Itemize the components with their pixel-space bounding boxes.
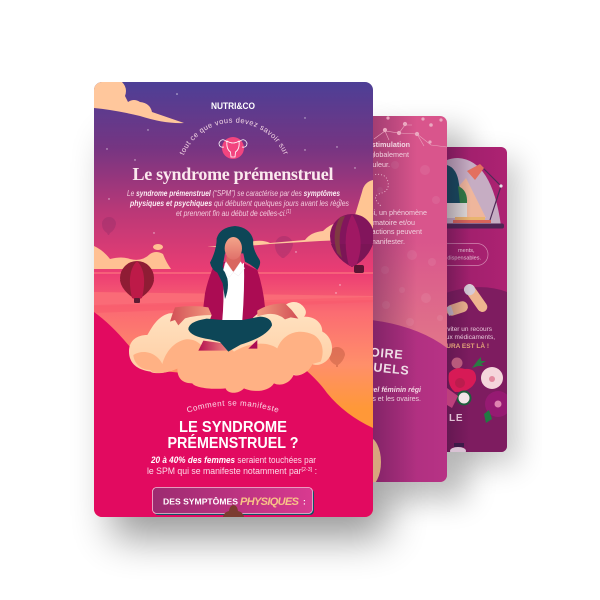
hair — [210, 226, 260, 299]
body text: 20 à 40% des femmes seraient touchées par — [150, 455, 316, 465]
text: medication: CURA EST LÀ ! — [442, 341, 489, 350]
text block: inflammation: réactions peuvent — [365, 227, 422, 236]
curved heading: comment se manifeste: Comment se manifeste — [187, 400, 278, 412]
body text: le SPM qui se manifeste notamment par — [147, 466, 307, 476]
panel: front card — [94, 82, 373, 517]
title group: brand: NUTRI&CO — [211, 101, 255, 111]
heading: le syndrome: LE SYNDROME — [179, 419, 287, 436]
cloud: right thin — [208, 224, 334, 247]
intro paragraph — [127, 189, 349, 218]
collar — [223, 262, 245, 277]
intro paragraph: Le syndrome prémenstruel (“SPM”) se caractérise par des symptômes — [127, 189, 340, 198]
button: physical symptoms: PHYSIQUES — [240, 496, 300, 508]
text block: inflammation: ainsi, un phénomène — [360, 208, 427, 217]
illustration stub — [373, 439, 381, 482]
stars — [106, 93, 356, 294]
rounded text pill: indispensables. — [443, 256, 481, 262]
text block: inflammation: inflammatoire et/ou — [354, 218, 415, 227]
infographic stack of three cards — [86, 82, 532, 564]
text block: cycle: cycle menstruel féminin régi — [326, 387, 422, 394]
text: medication: éviter un recours — [444, 326, 493, 333]
body text: [2-3] — [302, 467, 313, 473]
text: medication — [447, 326, 494, 348]
button: physical symptoms: DES SYMPTÔMES — [163, 496, 238, 506]
text block: inflammation — [373, 210, 427, 244]
heading: le syndrome: PRÉMENSTRUEL ? — [168, 435, 298, 452]
intro paragraph: et prennent fin au début de celles-ci. — [176, 209, 305, 218]
lower dark panel — [447, 287, 507, 452]
hot air balloon: left — [120, 261, 154, 303]
rounded text pill: ments, — [458, 248, 475, 254]
books and desk — [447, 217, 504, 228]
heading: partial: HISTOIRE — [339, 342, 404, 362]
heading: partial — [373, 348, 408, 375]
face — [225, 237, 242, 260]
text block: cycle — [373, 386, 422, 401]
text block: inflammation: se manifester. — [360, 237, 405, 246]
woman at desk — [447, 165, 486, 218]
lower panel curve — [373, 320, 447, 482]
shirt — [222, 263, 244, 320]
cloud under the woman — [129, 302, 332, 393]
drop shadows — [112, 130, 517, 538]
dotted curve — [372, 174, 388, 206]
body text — [147, 455, 317, 476]
molecule network — [374, 117, 447, 147]
bubble pattern — [377, 161, 443, 326]
shadow cast on middle card — [373, 116, 410, 482]
text block: overstimulation — [373, 142, 410, 167]
faint balloons — [102, 217, 345, 367]
intro paragraph: physiques et psychiques qui débutent quelques jours avant les règles — [129, 199, 349, 208]
text block: overstimulation: globalement — [370, 150, 409, 159]
neck — [226, 255, 241, 272]
left hand — [170, 306, 212, 325]
icon: uterus — [219, 137, 247, 159]
curved subtitle: tout ce que vous devez savoir sur — [180, 117, 288, 155]
heading: le syndrome — [168, 419, 298, 452]
intro paragraph: [1] — [285, 209, 292, 215]
hot air balloon: right — [330, 214, 374, 273]
bottom icon stub — [450, 443, 466, 452]
lamp alcove — [447, 158, 501, 224]
horizon stripes — [94, 272, 373, 313]
icon stub: bottom — [223, 505, 244, 517]
heading: partial: MENSTRUELS — [316, 354, 410, 378]
text: medication: aux médicaments, — [442, 334, 495, 341]
woman meditating — [170, 226, 298, 352]
shoes — [198, 341, 228, 351]
icon: bandages — [447, 284, 488, 316]
cloud: left — [94, 246, 171, 269]
trousers — [188, 317, 272, 352]
text block: overstimulation: surstimulation — [360, 140, 410, 149]
right hand — [257, 303, 298, 319]
shadow cast on back card — [447, 147, 468, 452]
pink hill — [94, 312, 373, 517]
body text: : — [312, 466, 317, 476]
cloud: top left — [94, 82, 184, 123]
title: Le syndrome prémenstruel — [132, 164, 334, 184]
button: physical symptoms: : — [303, 496, 306, 506]
text block: overstimulation: douleur. — [364, 160, 390, 169]
button: physical symptoms — [152, 488, 314, 515]
panel: back card — [447, 147, 507, 452]
text block: cycle: l'utérus et les ovaires. — [354, 396, 421, 403]
flower illustration — [447, 357, 511, 423]
desk lamp — [467, 164, 503, 220]
panel: middle card — [373, 116, 447, 482]
rounded text pill — [447, 243, 488, 266]
partial heading: LE — [449, 413, 463, 424]
cloud: right top — [355, 180, 373, 230]
jacket — [203, 262, 265, 324]
